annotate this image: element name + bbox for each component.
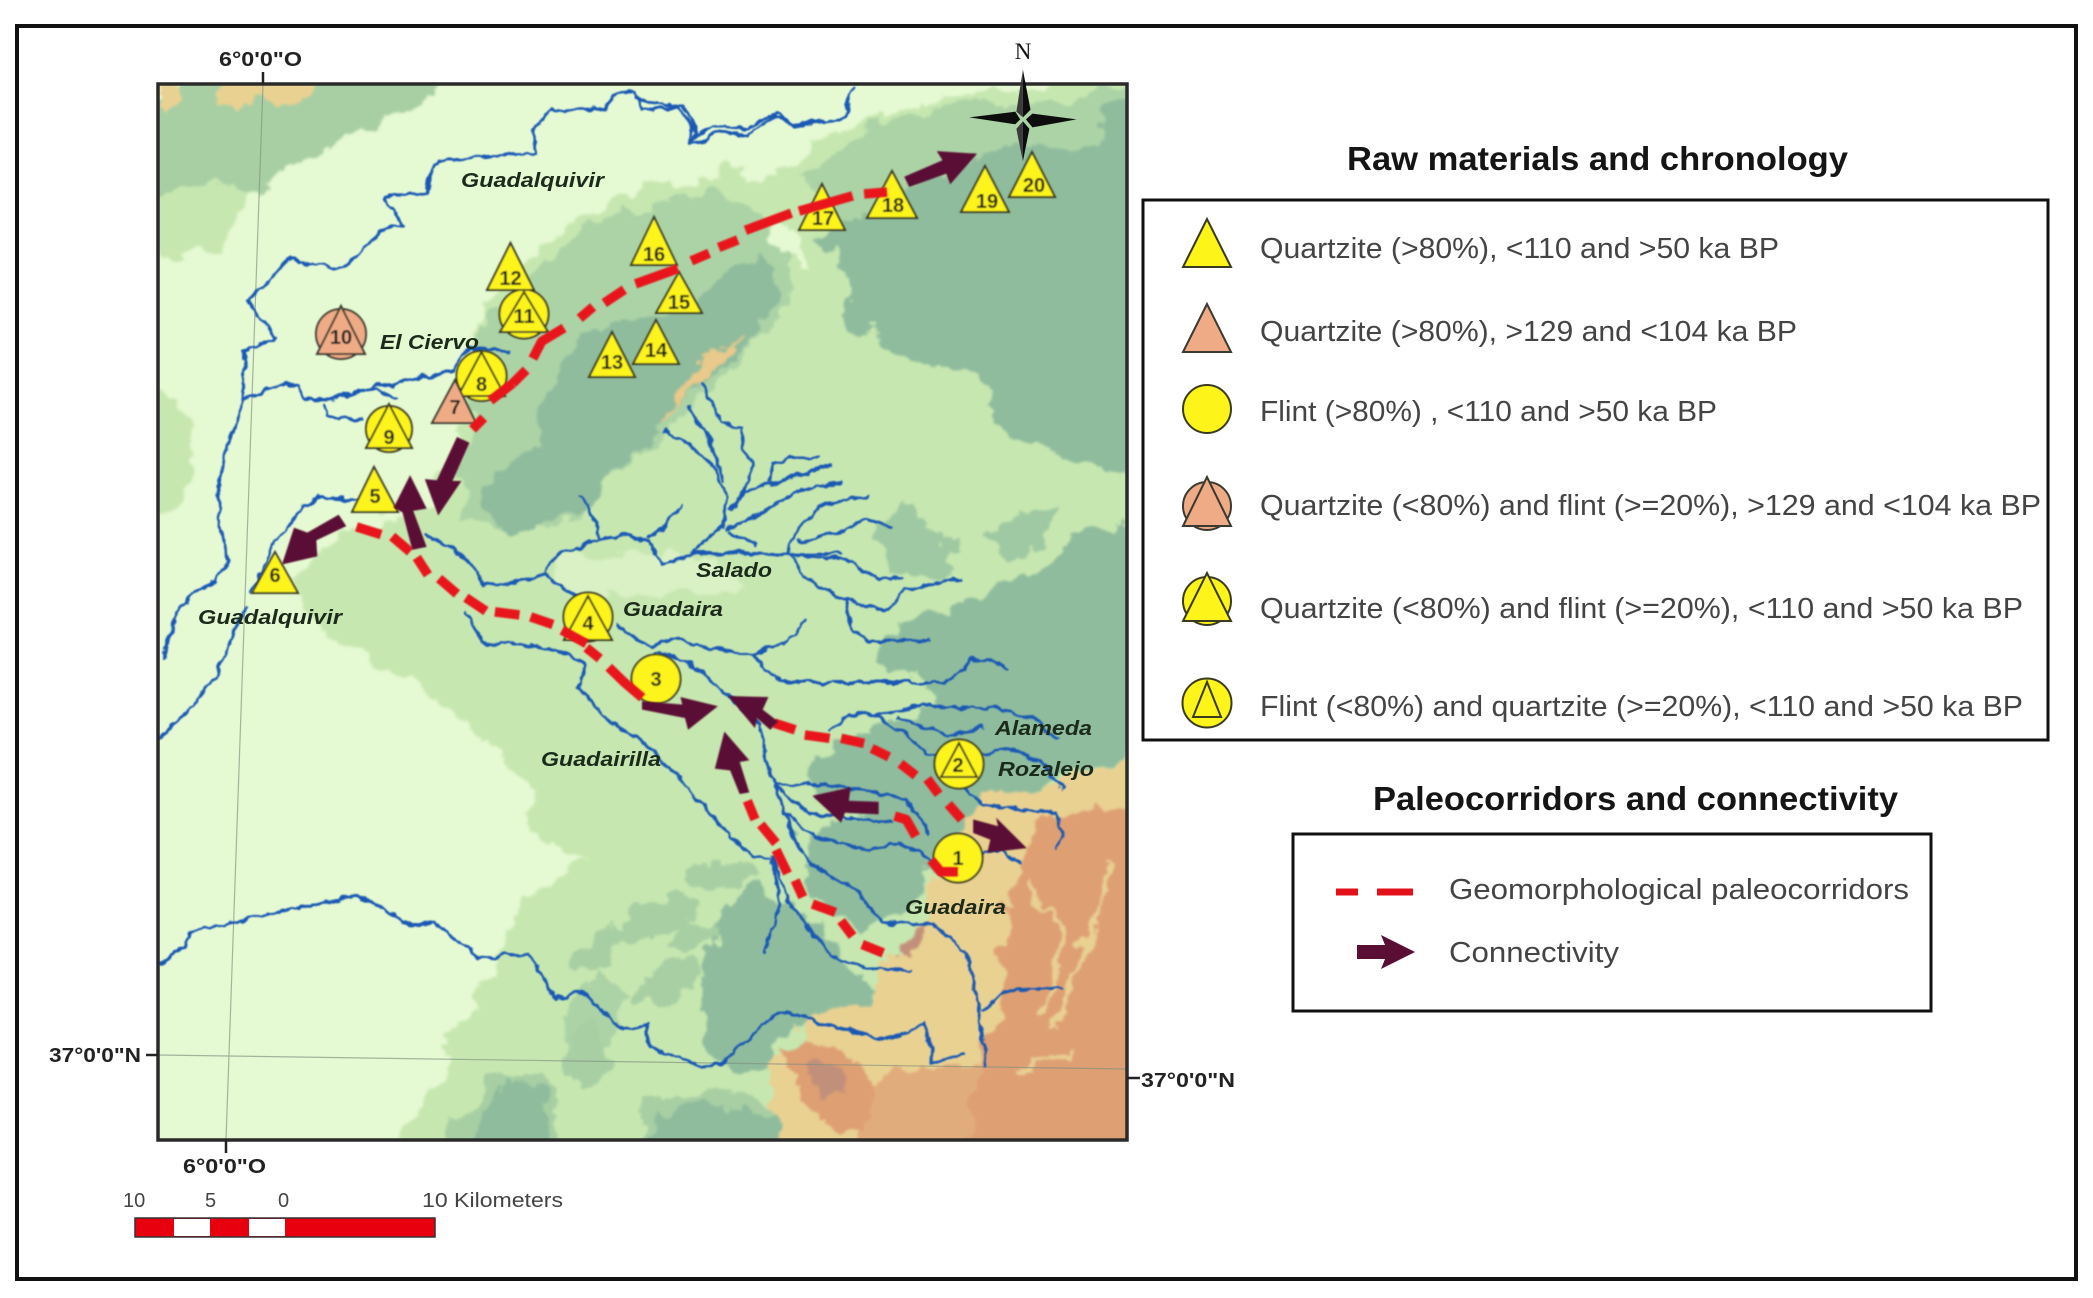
legend row 6 [1182,678,2023,728]
site 8: 8 [476,374,487,396]
compass rose [969,39,1076,161]
river names: Guadalquivir [198,607,343,629]
site 5: 5 [369,486,381,508]
scale bar: 5 [205,1190,216,1212]
site 3: 3 [650,669,662,691]
site markers [252,152,1055,882]
river names: Guadalquivir [461,170,605,192]
river names: Guadaira [905,897,1006,919]
site 7 [432,380,476,423]
site 13: 13 [601,352,623,374]
legend item: corridor: Geomorphological paleocorridors [1449,874,1909,906]
site 11: 11 [513,306,535,328]
site 4 [564,592,612,642]
site 16: 16 [643,244,665,266]
coordinate ticks [146,72,1140,1153]
site 17: 17 [812,208,834,230]
river names: Salado [696,560,772,582]
coordinate label: right: 37°0'0"N [1141,1070,1235,1092]
site 9: 9 [383,427,395,449]
legend heading: paleocorridors: Paleocorridors and connectivity [1373,780,1899,817]
legend row 5 [1183,573,2023,625]
scale bar [123,1190,563,1237]
site 14 [633,320,679,364]
legend item: connectivity [1357,935,1620,969]
site 12: 12 [499,268,522,290]
site 20 [1009,152,1055,197]
legend row 6: Flint (<80%) and quartzite (>=20%), <110 and >50 ka BP [1260,691,2023,723]
site 10 [316,306,366,359]
site 17 [799,184,845,230]
site 10: 10 [330,327,352,349]
site 1: 1 [952,848,964,870]
map frame [158,84,1127,1140]
legend row 1: Quartzite (>80%), <110 and >50 ka BP [1260,233,1779,265]
legend row 5: Quartzite (<80%) and flint (>=20%), <110 and >50 ka BP [1260,593,2023,625]
legend row 4 [1183,477,2041,530]
site 14: 14 [645,340,668,362]
compass rose: N [1015,39,1032,64]
connectivity arrows [282,151,1027,853]
site 2: 2 [952,755,964,777]
site 2 [934,740,984,788]
site 11 [500,290,548,338]
site 8 [456,351,506,401]
site 5 [352,467,398,512]
site 7: 7 [449,397,461,419]
legend row 1 [1183,219,1779,267]
site 20: 20 [1023,175,1045,197]
river names [198,170,1094,919]
site 1 [934,834,982,882]
site 18: 18 [882,195,904,217]
river names: Guadairilla [541,749,661,771]
river names: Alameda [994,718,1092,740]
river names: Guadaira [623,599,723,621]
site 15 [656,272,702,314]
legend panel: raw materials and chronology [1143,200,2048,740]
scale bar: 10 Kilometers [422,1190,563,1212]
site 16 [631,217,677,266]
scale bar: 10 [123,1190,145,1212]
site 6 [252,552,298,593]
coordinate label: bottom: 6°0'0"O [183,1156,266,1178]
site 9 [366,404,412,452]
site 18 [867,171,917,218]
site 19 [961,166,1009,213]
legend row 4: Quartzite (<80%) and flint (>=20%), >129 and <104 ka BP [1260,490,2041,522]
legend panel: paleocorridors and connectivity [1293,834,1931,1011]
river names: El Ciervo [380,332,479,354]
site 12 [487,243,534,290]
geomorphological paleocorridors [357,192,962,953]
map panel [49,39,1235,1237]
legend item: connectivity: Connectivity [1449,937,1620,969]
rivers [158,87,1063,1066]
graticule [158,84,1127,1140]
legend row 3: Flint (>80%) , <110 and >50 ka BP [1260,396,1717,428]
site 15: 15 [668,292,690,314]
site 13 [589,332,635,377]
site 19: 19 [976,191,998,213]
scale bar: 0 [278,1190,289,1212]
legend row 3 [1183,385,1717,433]
site 3 [632,654,680,704]
coordinate label: top: 6°0'0"O [219,49,302,71]
legend row 2 [1183,304,1797,352]
site 6: 6 [269,565,281,587]
site 4: 4 [582,613,594,635]
coordinate label: left: 37°0'0"N [49,1045,141,1067]
legend heading: raw materials: Raw materials and chronology [1347,140,1849,177]
legend row 2: Quartzite (>80%), >129 and <104 ka BP [1260,316,1797,348]
river names: Rozalejo [998,759,1094,781]
terrain relief [140,67,1148,1161]
